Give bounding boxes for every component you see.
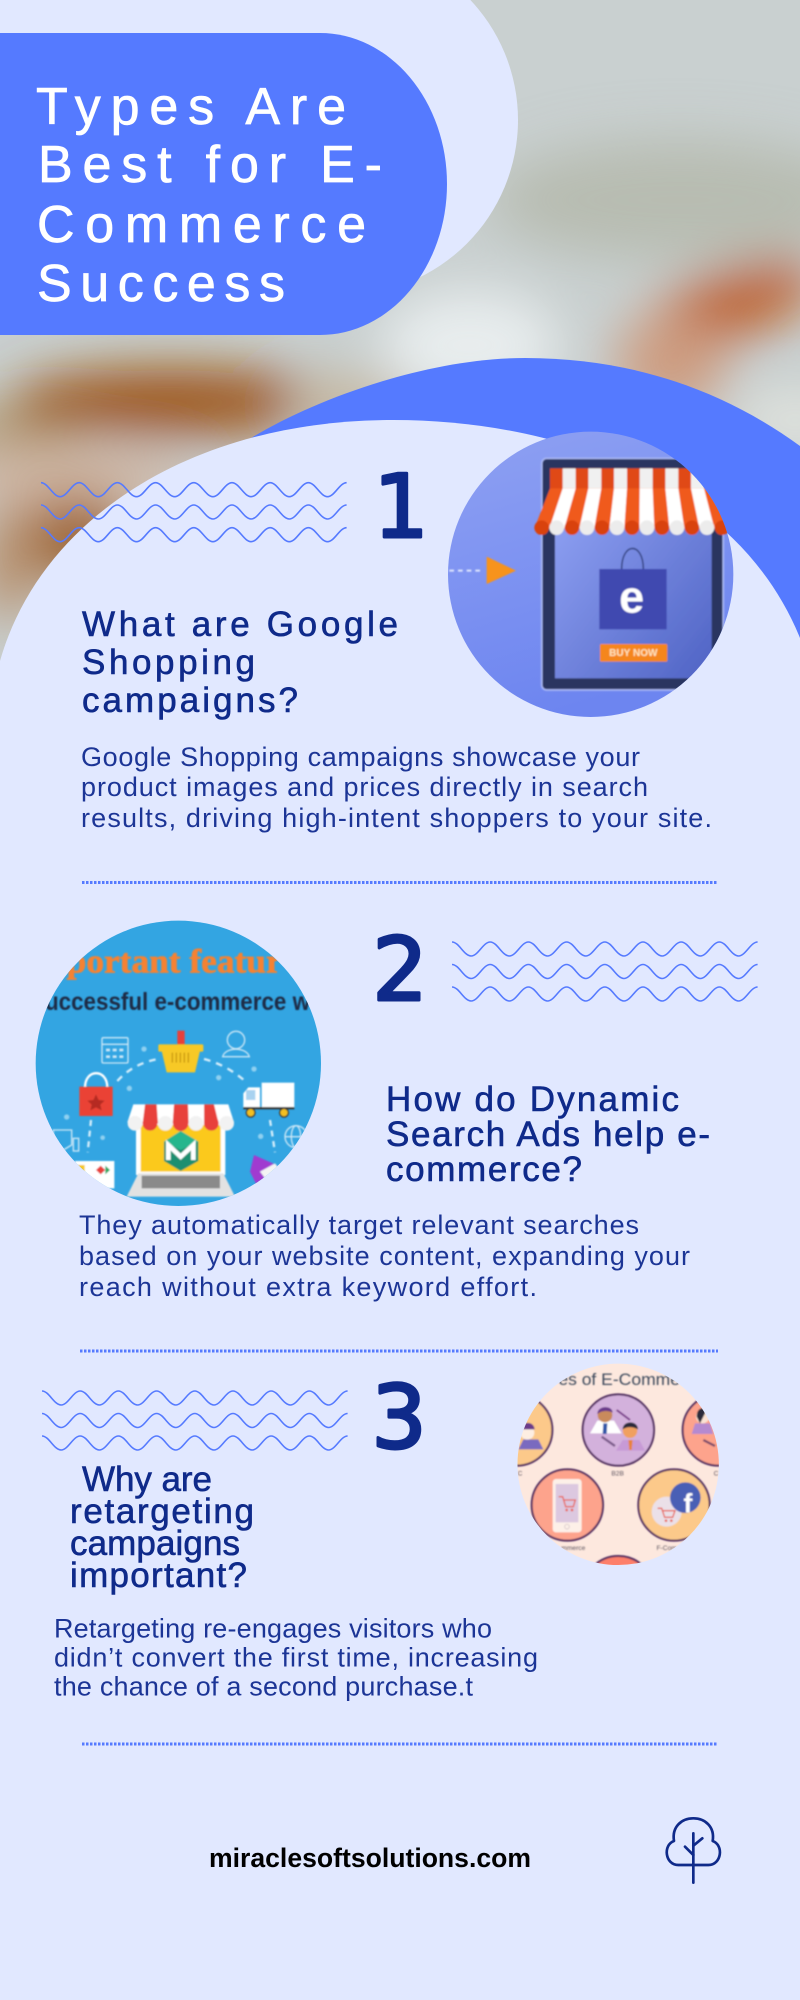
heading 3: Why are [82, 1460, 212, 1499]
icon: tree [667, 1818, 720, 1883]
number 3: 3 [371, 1367, 427, 1469]
body text 1: results, driving high-intent shoppers to your site. [81, 803, 712, 833]
title text: Types Are [36, 78, 346, 136]
heading 2: How do Dynamic [386, 1080, 679, 1119]
wave decoration 3 [42, 1391, 348, 1450]
image: e-commerce features: portant featur [67, 943, 282, 980]
heading 2 [386, 1080, 710, 1189]
blurred photo background [0, 0, 800, 720]
number 2: 2 [372, 919, 428, 1021]
image: e-commerce features [30, 915, 330, 1215]
website footer text: miraclesoftsolutions.com [209, 1843, 531, 1873]
title text: Commerce [37, 196, 366, 254]
image: types of e-commerce: C [518, 1471, 523, 1478]
title text: Best for E- [38, 136, 382, 194]
number 1: 1 [373, 456, 429, 558]
title text [36, 78, 382, 313]
heading 1: campaigns? [82, 681, 298, 720]
body text 2: They automatically target relevant searches [79, 1210, 639, 1240]
body text 3: Retargeting re-engages visitors who [54, 1614, 492, 1644]
body text 1: product images and prices directly in search [81, 772, 648, 802]
body text 3: didn’t convert the first time, increasing [54, 1643, 538, 1673]
title text: Success [37, 255, 285, 313]
heading 1 [82, 605, 398, 720]
wave decoration 1 [41, 483, 347, 542]
body text 3 [54, 1614, 538, 1702]
image: types of e-commerce: F-Com [656, 1545, 677, 1552]
heading 3 [70, 1460, 254, 1595]
title banner [0, 33, 447, 335]
main content panel [0, 420, 800, 2000]
image: online store tablet: e [619, 572, 644, 623]
wave decoration 2 [452, 942, 758, 1001]
image: online store tablet [440, 420, 740, 720]
image: types of e-commerce: C [714, 1471, 719, 1478]
blue arc behind content panel [240, 358, 800, 700]
image: e-commerce features: uccessful e-commerce w [45, 988, 310, 1016]
heading 2: commerce? [386, 1150, 582, 1189]
image: online store tablet: BUY NOW [609, 648, 658, 659]
body text 2: reach without extra keyword effort. [79, 1272, 537, 1302]
image: types of e-commerce: mmerce [561, 1545, 586, 1552]
heading 1: What are Google [82, 605, 398, 644]
heading 3: campaigns [70, 1524, 240, 1563]
body text 2: based on your website content, expanding your [79, 1241, 690, 1271]
image: types of e-commerce: f [684, 1489, 693, 1519]
image: types of e-commerce [518, 1364, 719, 1565]
heading 3: retargeting [70, 1492, 254, 1531]
image: types of e-commerce: es of E-Comme [558, 1370, 680, 1389]
heading 3: important? [70, 1556, 247, 1595]
image: types of e-commerce: B2B [611, 1471, 625, 1478]
heading 2: Search Ads help e- [386, 1115, 710, 1154]
body text 1 [81, 742, 712, 833]
body text 1: Google Shopping campaigns showcase your [81, 742, 640, 772]
body text 2 [79, 1210, 690, 1302]
body text 3: the chance of a second purchase.t [54, 1672, 473, 1702]
top light blob behind title [0, 0, 518, 300]
heading 1: Shopping [82, 643, 255, 682]
